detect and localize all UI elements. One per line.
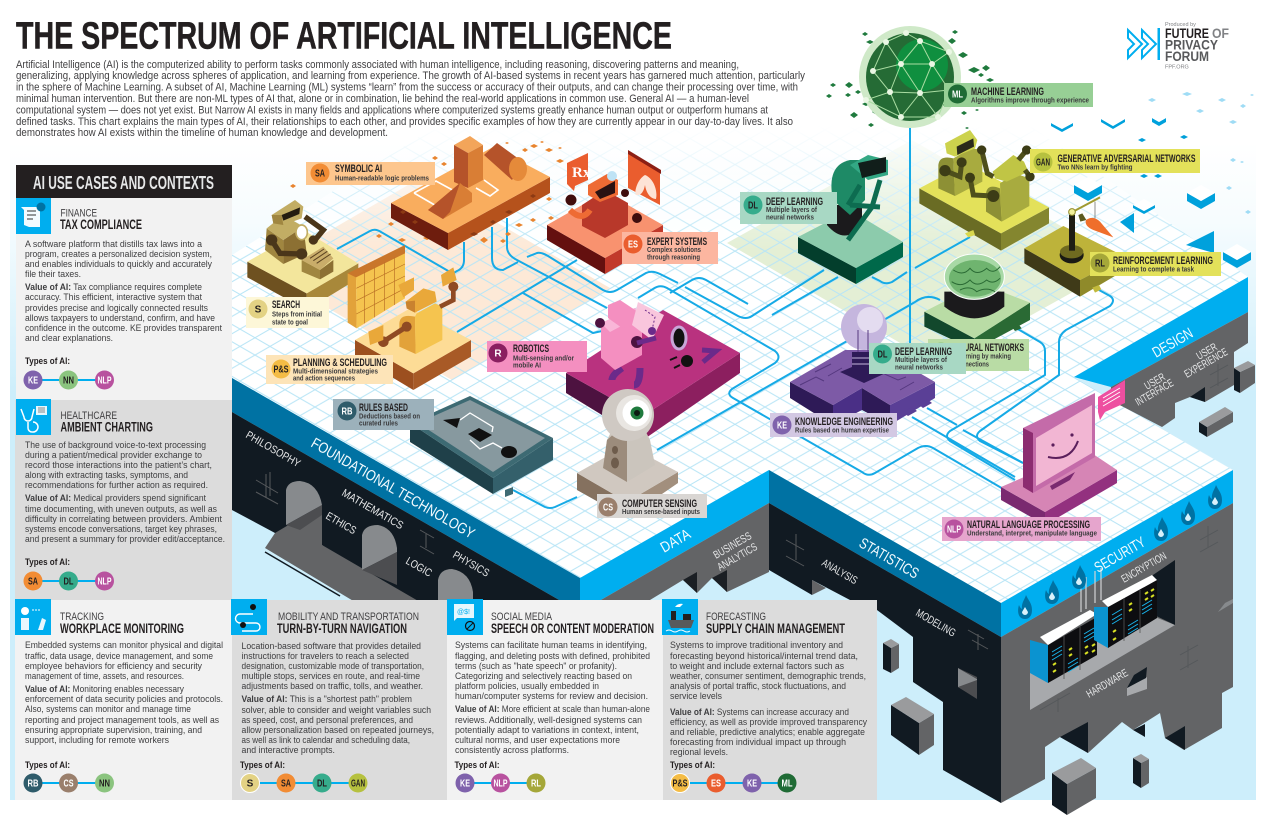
station: symbolic AI xyxy=(290,136,564,250)
panel: forecasting: regional levels. xyxy=(670,747,728,758)
panel: tracking: ensuring appropriate supervision, training, and xyxy=(25,725,202,736)
wall: foundational technology xyxy=(232,378,580,640)
panel: mobility: adjustments based on traffic, tolls, and weather. xyxy=(242,681,423,692)
type chips: ES xyxy=(711,778,721,790)
station: neural networks xyxy=(924,254,1030,350)
panel: healthcare xyxy=(15,399,232,600)
label: deep learning lower: neural networks xyxy=(895,362,943,372)
type chips: RB xyxy=(28,778,38,790)
station: planning and scheduling xyxy=(348,245,471,390)
station: deep learning thinker xyxy=(798,155,903,284)
type chips: NN xyxy=(63,376,74,386)
logo: future of privacy forum: OF xyxy=(1212,25,1229,41)
panel header xyxy=(16,165,232,199)
panel: tracking: management of time, assets, and resources. xyxy=(25,671,184,682)
type chips xyxy=(456,774,546,792)
panel: forecasting: forecasting beyond historical/internal trend data, xyxy=(670,651,858,662)
panel: forecasting: and reliable, predictive analytics; enable aggregate xyxy=(670,727,865,738)
label: generative adversarial networks: GAN xyxy=(1036,158,1050,168)
panel: healthcare: along with extracting tasks, symptoms, and xyxy=(25,470,188,481)
type chips xyxy=(670,774,796,792)
wall: design: EXPERIENCE xyxy=(1182,346,1230,381)
panel: finance: A software platform that distills tax laws into a xyxy=(25,239,203,250)
type chips: NLP xyxy=(494,778,508,790)
type chips: S xyxy=(247,778,254,790)
label: symbolic AI: Human-readable logic problems xyxy=(335,174,429,182)
label: knowledge engineering: Rules based on human expertise xyxy=(795,426,889,434)
panel: social media: terms (such as "hate speech" or profanity). xyxy=(455,661,617,672)
panel: forecasting: service levels xyxy=(670,691,722,702)
label: expert systems xyxy=(622,232,718,264)
panel: forecasting: Systems to improve traditional inventory and xyxy=(670,640,843,651)
intro text: in the sphere of Machine Learning. A subset of AI, Machine Learning (ML) systems “learn” from the success or accuracy of their outputs, and can change their processing over time, with xyxy=(16,82,798,94)
panel: tracking: Value of AI: Monitoring enables necessary xyxy=(25,684,184,695)
label: robotics: R xyxy=(494,348,502,360)
label: deep learning upper: DL xyxy=(748,200,758,212)
floating blocks xyxy=(883,361,1255,815)
type chips: KE xyxy=(460,778,470,790)
wall: security and hardware xyxy=(1001,470,1233,803)
label: natural language processing: Understand, interpret, manipulate language xyxy=(967,528,1097,538)
icon: moderation: @$! xyxy=(457,609,470,616)
panel: healthcare: record those interactions into the patient’s chart, xyxy=(25,460,212,471)
label: natural language processing: NLP xyxy=(947,524,961,536)
station: search xyxy=(247,200,358,310)
label: symbolic AI: SA xyxy=(315,168,325,180)
label: deep learning lower: DEEP LEARNING xyxy=(895,346,952,358)
label: neural networks: connections xyxy=(955,360,989,368)
station: reinforcement learning xyxy=(1024,197,1125,297)
panel: tracking: traffic, data usage, device management, and some xyxy=(25,651,213,662)
title: THE SPECTRUM OF ARTIFICIAL INTELLIGENCE xyxy=(16,16,672,58)
label: natural language processing: NATURAL LANGUAGE PROCESSING xyxy=(967,519,1090,531)
panel: healthcare: Types of AI: xyxy=(25,557,70,567)
intro text: minimal human intervention. But there are non-ML types of AI that, alone or in combination, lie behind the real-world applications in common use. General AI — a human-level xyxy=(16,93,749,105)
wall: statistics: MODELING xyxy=(914,607,958,640)
label: security: SECURITY xyxy=(1092,534,1148,576)
panel: forecasting: Value of AI: Systems can increase accuracy and xyxy=(670,707,849,718)
panel: mobility xyxy=(231,599,447,800)
label: expert systems: through reasoning xyxy=(647,252,700,262)
type chips: ML xyxy=(782,778,792,790)
panel: healthcare: The use of background voice-to-text processing xyxy=(25,440,206,451)
panel: social media: potentially adapt to variations in context, intent, xyxy=(455,725,639,736)
label: deep learning lower: DL xyxy=(878,350,888,360)
panel: forecasting: weather, consumer sentiment, demographic trends, xyxy=(669,671,866,682)
station: knowledge engineering xyxy=(790,304,935,425)
label: machine learning: Algorithms improve through experience xyxy=(971,96,1089,104)
icon: navigation route xyxy=(231,599,267,635)
icon: machine learning globe xyxy=(826,26,994,129)
panel: forecasting: Types of AI: xyxy=(670,760,715,770)
wall: data xyxy=(580,470,769,640)
panel: social media: cultural norms, and user expectations more xyxy=(455,735,620,746)
panel: finance: Value of AI: Tax compliance requires complete xyxy=(25,282,202,293)
panel: healthcare: during a patient/medical provider exchange to xyxy=(25,450,202,461)
panel: mobility: instructions for travelers to reach a selected xyxy=(242,651,409,662)
wall: data: BUSINESS xyxy=(712,530,754,562)
label: statistics: STATISTICS xyxy=(856,535,922,582)
intro text: Artificial Intelligence (AI) is the computerized ability to perform tasks commonly associated with human intelligence, including reasoning, discovering patterns and meaning, xyxy=(16,59,739,71)
panel: finance: and clear explanations. xyxy=(25,333,113,344)
wall: design: INTERFACE xyxy=(1134,377,1176,409)
panel: tracking: enforcement of data security policies and protocols. xyxy=(25,694,223,705)
label: machine learning xyxy=(944,83,1093,107)
panel: finance: provides precise and logically connected results xyxy=(25,303,208,314)
panel: social media: platform policies, usually embedded in xyxy=(455,681,599,692)
type chips: KE xyxy=(747,778,757,790)
station: natural language processing xyxy=(1001,380,1125,525)
panel: forecasting: forecasting from individual impact up through xyxy=(670,737,846,748)
panel: healthcare: AMBIENT CHARTING xyxy=(60,420,153,434)
logo: future of privacy forum: Produced by xyxy=(1165,22,1196,28)
logo: future of privacy forum: FPF.ORG xyxy=(1165,64,1189,70)
panel: finance xyxy=(16,198,232,400)
label: data: DATA xyxy=(658,526,694,556)
intro text xyxy=(16,59,806,139)
label: symbolic AI xyxy=(306,162,435,185)
panel: social media xyxy=(447,599,663,800)
wall: data: ANALYTICS xyxy=(716,541,760,574)
panel: tracking: support, including for remote workers xyxy=(25,735,169,746)
wall: design: USER xyxy=(1142,371,1168,393)
panel: mobility: Location-based software that provides detailed xyxy=(242,641,421,652)
wall: design: USER xyxy=(1194,341,1220,363)
panel: tracking: reporting and project management tools, as well as xyxy=(25,715,219,726)
label: rules based: RB xyxy=(342,406,352,418)
label: knowledge engineering: KE xyxy=(777,420,787,432)
label: planning and scheduling: Multi-dimensional strategies xyxy=(293,366,378,376)
panel header: AI USE CASES AND CONTEXTS xyxy=(33,172,214,193)
label: deep learning upper: neural networks xyxy=(766,212,814,222)
background sky xyxy=(10,143,1256,800)
panel: mobility: allow personalization based on repeated journeys, xyxy=(242,725,434,736)
label: computer sensing: CS xyxy=(603,502,613,514)
panel: social media: flagging, and deleting posts with defined, prohibited xyxy=(455,651,650,662)
label: search xyxy=(246,297,329,328)
logo: future of privacy forum: FUTURE xyxy=(1165,25,1209,41)
panel: finance: FINANCE xyxy=(60,208,97,220)
label: search: S xyxy=(255,304,262,316)
panel: social media: reviews. Additionally, well-designed systems can xyxy=(455,715,642,726)
wall: foundational technology: LOGIC xyxy=(404,555,434,580)
panel: forecasting: FORECASTING xyxy=(706,611,766,623)
label: computer sensing xyxy=(597,494,707,518)
panel: social media: Systems can facilitate human teams in identifying, xyxy=(455,640,647,651)
panel: healthcare: and present a summary for provider edit/acceptance. xyxy=(25,534,225,545)
label: search: state to goal xyxy=(272,318,308,326)
panel: mobility: solver, able to consider and weight variables such xyxy=(242,705,431,716)
type chips: DL xyxy=(317,778,327,790)
type chips: RL xyxy=(531,778,541,790)
label: expert systems: Complex solutions xyxy=(647,245,701,254)
label: design: DESIGN xyxy=(1150,325,1196,361)
label: planning and scheduling xyxy=(266,355,393,384)
type chips: GAN xyxy=(351,778,365,790)
label: neural networks xyxy=(928,339,1029,371)
label: search: Steps from initial xyxy=(272,310,322,318)
logo: future of privacy forum: FORUM xyxy=(1165,48,1209,64)
panel: tracking: Also, systems can monitor and manage time xyxy=(25,704,191,715)
panel: mobility: and interactive prompts. xyxy=(242,745,335,756)
type chips: CS xyxy=(64,778,74,790)
panel: mobility: multiple stops, services en route, and real-time xyxy=(242,671,420,682)
panel: forecasting: SUPPLY CHAIN MANAGEMENT xyxy=(706,621,846,636)
station: expert systems xyxy=(547,150,663,274)
wall: foundational technology: PHYSICS xyxy=(450,549,491,580)
intro text: computational system — does not yet exist. But Narrow AI exists in many fields and applications where computerized systems greatly enhance human output or outperform humans at xyxy=(16,104,768,116)
label: generative adversarial networks xyxy=(1030,149,1200,173)
panel: healthcare: Value of AI: Medical providers spend significant xyxy=(25,493,206,504)
label: generative adversarial networks: GENERATIVE ADVERSARIAL NETWORKS xyxy=(1058,153,1196,165)
icon: stethoscope xyxy=(16,399,51,435)
station: expert systems: Rx xyxy=(572,165,591,181)
type chips: DL xyxy=(64,576,74,588)
panel: forecasting: efficiency, as well as provide improved transparency xyxy=(670,717,867,728)
wall: design xyxy=(1074,277,1248,427)
type chips: NLP xyxy=(98,376,112,386)
label: deep learning upper: DEEP LEARNING xyxy=(766,196,823,208)
panel: mobility: TURN-BY-TURN NAVIGATION xyxy=(277,621,407,636)
panel: tracking: Types of AI: xyxy=(25,760,70,770)
intro text: demonstrates how AI exists within the timeline of human knowledge and development. xyxy=(16,127,388,139)
panel: social media: human/computer systems for review and decision. xyxy=(455,691,648,702)
wall: foundational technology: MATHEMATICS xyxy=(340,487,405,532)
label: planning and scheduling: PLANNING & SCHEDULING xyxy=(293,357,387,369)
label: robotics: Multi-sensing and/or xyxy=(513,354,574,362)
label: robotics xyxy=(487,341,587,372)
label: deep learning lower xyxy=(869,343,966,374)
circuit wires xyxy=(337,127,1113,508)
panel: finance: file their taxes. xyxy=(25,269,81,280)
wall: security and hardware: ENCRYPTION xyxy=(1120,550,1169,586)
server niche xyxy=(1030,560,1175,710)
panel: finance: accuracy. This efficient, interactive system that xyxy=(25,292,202,303)
label: reinforcement learning xyxy=(1090,252,1221,276)
label: planning and scheduling: P&S xyxy=(274,364,289,376)
type chips: KE xyxy=(28,376,38,386)
label: deep learning upper: Multiple layers of xyxy=(766,205,817,214)
panel: healthcare: recommendations for further action as required. xyxy=(25,480,208,491)
label: knowledge engineering: KNOWLEDGE ENGINEERING xyxy=(795,416,893,428)
panel: social media: SOCIAL MEDIA xyxy=(491,611,553,623)
panel: social media: Types of AI: xyxy=(454,760,500,770)
panel: mobility: Value of AI: This is a "shortest path" problem xyxy=(242,694,412,705)
panel: mobility: designation, customizable mode of transportation, xyxy=(242,661,424,672)
panel: finance: allows taxpayers to understand, confirm, and have xyxy=(25,313,215,324)
panel: mobility: as well as link to calendar and scheduling data, xyxy=(242,735,410,746)
label: rules based: Deductions based on xyxy=(359,412,420,420)
label: neural networks: NEURAL NETWORKS xyxy=(955,342,1024,354)
panel: social media: consistently across platforms. xyxy=(455,745,569,756)
wall: statistics xyxy=(769,470,1001,803)
station: generative adversarial networks xyxy=(919,130,1049,251)
label: robotics: mobile AI xyxy=(513,360,541,370)
label: rules based xyxy=(333,399,434,430)
label: natural language processing xyxy=(942,517,1101,541)
panel: social media: SPEECH OR CONTENT MODERATION xyxy=(491,621,654,636)
label: symbolic AI: SYMBOLIC AI xyxy=(335,163,382,175)
type chips xyxy=(24,370,114,390)
label: expert systems: EXPERT SYSTEMS xyxy=(647,236,707,248)
label: machine learning: ML xyxy=(952,90,963,100)
type chips xyxy=(24,774,114,792)
panel: social media: Value of AI: More efficient at scale than human-alone xyxy=(455,704,650,715)
icon: cargo ship xyxy=(662,599,698,635)
label: planning and scheduling: and action sequences xyxy=(293,374,355,382)
panel: healthcare: HEALTHCARE xyxy=(60,410,117,422)
panel: mobility: as speed, cost, and personal preferences, and xyxy=(242,715,413,726)
label: rules based: curated rules xyxy=(359,418,398,428)
label: computer sensing: COMPUTER SENSING xyxy=(622,498,697,510)
type chips: NN xyxy=(99,778,110,790)
panel: healthcare: systems encode conversations, target key phrases, xyxy=(25,524,217,535)
panel: mobility: Types of AI: xyxy=(240,760,285,770)
type chips: SA xyxy=(281,778,291,790)
label: machine learning: MACHINE LEARNING xyxy=(971,86,1044,98)
panel: finance: program, creates a personalized decision system, xyxy=(25,249,212,260)
label: deep learning lower: Multiple layers of xyxy=(895,355,947,364)
panel: forecasting xyxy=(662,599,877,800)
panel: forecasting: to weight and include external factors such as xyxy=(670,661,844,672)
type chips xyxy=(240,774,368,792)
panel: mobility: MOBILITY AND TRANSPORTATION xyxy=(278,611,419,623)
station: computer sensing xyxy=(577,389,678,518)
panel: tracking: employee behaviors for efficiency and security xyxy=(25,661,202,672)
label: rules based: RULES BASED xyxy=(359,402,408,414)
type chips: SA xyxy=(28,576,38,588)
intro text: generalizing, applying knowledge across spheres of application, and learning from experience. The growth of AI-based systems in recent years has garnered much attention, particularly xyxy=(16,70,806,82)
intro text: defined tasks. This chart explains the main types of AI, their relationships to each other, and provides specific examples of how they are currently appear in our day-to-day lives. It also xyxy=(16,116,793,128)
panel: finance: and enables individuals to quickly and accurately xyxy=(25,259,212,270)
icon: moderation xyxy=(447,599,483,635)
flames xyxy=(1018,485,1222,619)
panel: finance: TAX COMPLIANCE xyxy=(60,217,142,232)
floating tiles and particles top right xyxy=(1051,92,1254,268)
panel: tracking: Embedded systems can monitor physical and digital xyxy=(25,640,223,651)
label: reinforcement learning: Learning to complete a task xyxy=(1113,264,1195,274)
label: reinforcement learning: REINFORCEMENT LEARNING xyxy=(1113,255,1213,267)
label: reinforcement learning: RL xyxy=(1095,258,1105,270)
icon: tax document xyxy=(16,198,51,234)
panel: forecasting: analysis of portal traffic, stock fluctuations, and xyxy=(670,681,846,692)
label: computer sensing: Human sense-based inputs xyxy=(622,507,700,516)
label: search: SEARCH xyxy=(272,299,300,311)
logo: future of privacy forum: PRIVACY xyxy=(1165,36,1219,52)
panel: tracking: WORKPLACE MONITORING xyxy=(60,621,184,636)
panel: healthcare: difficulty in correlating between providers. Ambient xyxy=(25,514,222,525)
panel: social media: Categorizing and selectively reacting based on xyxy=(455,671,632,682)
label: expert systems: ES xyxy=(628,240,638,250)
wall: foundational technology: PHILOSOPHY xyxy=(244,429,303,470)
station: rules based xyxy=(410,396,553,497)
wall: security and hardware: HARDWARE xyxy=(1084,667,1130,701)
wall: foundational technology: ETHICS xyxy=(324,510,358,537)
panel: tracking xyxy=(15,599,232,800)
type chips: P&S xyxy=(672,778,688,790)
icon: workplace monitoring xyxy=(15,599,51,635)
type chips xyxy=(24,572,114,590)
panel: finance: Types of AI: xyxy=(25,356,70,366)
label: knowledge engineering xyxy=(770,413,897,437)
label: robotics: ROBOTICS xyxy=(513,343,549,355)
panel: finance: confidence in the outcome. KE provides transparent xyxy=(25,323,222,334)
platform top surface xyxy=(232,110,1252,610)
label: deep learning upper xyxy=(740,192,837,224)
icon: speech bubble xyxy=(1098,380,1125,420)
station: robotics xyxy=(566,300,740,440)
panel: healthcare: time documenting, with uneven outputs, as well as xyxy=(25,504,217,515)
wall: statistics: ANALYSIS xyxy=(820,557,859,587)
logo: future of privacy forum xyxy=(1128,22,1229,70)
panel: tracking: TRACKING xyxy=(60,611,104,623)
type chips: NLP xyxy=(98,576,112,588)
label: generative adversarial networks: Two NNs learn by fighting xyxy=(1058,162,1133,172)
label: foundational technology: FOUNDATIONAL TECHNOLOGY xyxy=(308,435,478,542)
label: neural networks: Learning by making xyxy=(955,352,1011,360)
